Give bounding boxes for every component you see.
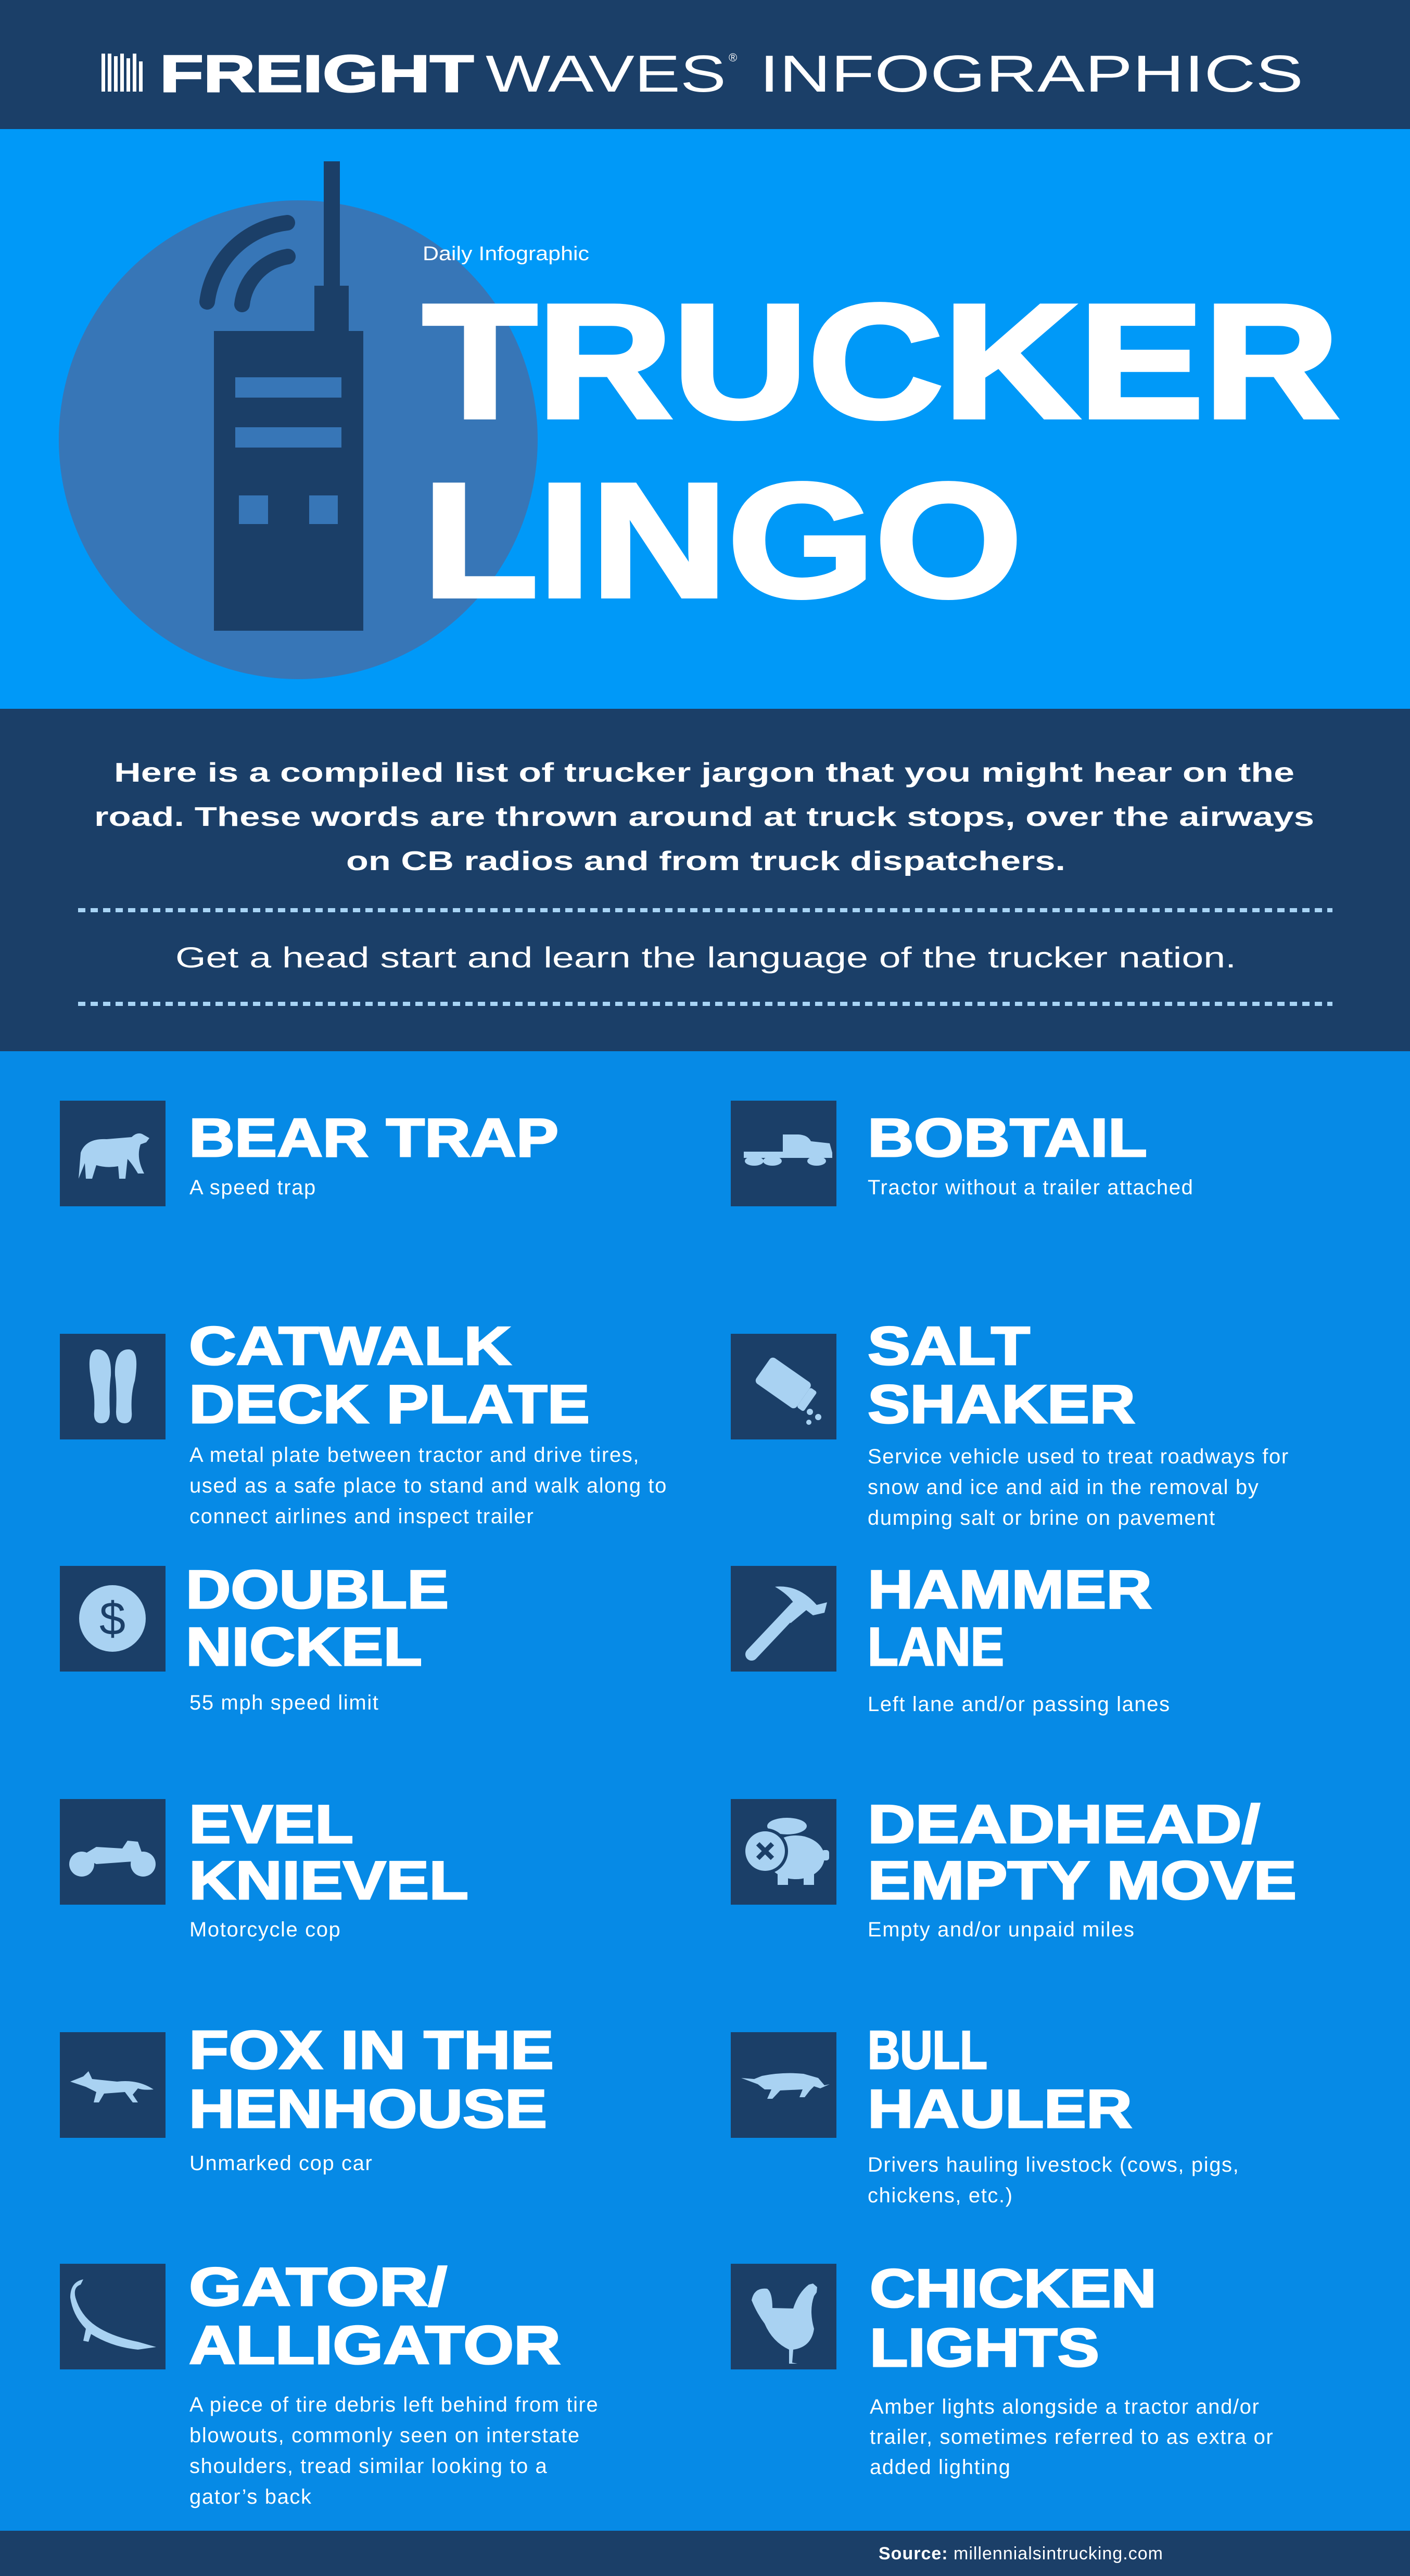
logo: freightwaves infographics: WAVES bbox=[486, 45, 726, 103]
term: gator alligator: blowouts, commonly seen on interstate bbox=[189, 2424, 580, 2447]
term: double nickel: DOUBLE bbox=[186, 1560, 449, 1620]
hero panel bbox=[0, 129, 1410, 709]
term: deadhead empty move: EMPTY MOVE bbox=[868, 1851, 1297, 1911]
icon: footprints bbox=[60, 1334, 166, 1439]
term: double nickel: NICKEL bbox=[186, 1617, 422, 1677]
term: gator alligator: A piece of tire debris left behind from tire bbox=[189, 2393, 599, 2416]
term: hammer lane: LANE bbox=[868, 1617, 1004, 1677]
term: salt shaker: Service vehicle used to treat roadways for bbox=[868, 1445, 1289, 1468]
term: bull hauler: Drivers hauling livestock (cows, pigs, bbox=[868, 2153, 1239, 2176]
term: gator alligator: ALLIGATOR bbox=[189, 2315, 561, 2376]
term: bull hauler bbox=[731, 2020, 1239, 2207]
term: salt shaker bbox=[731, 1316, 1289, 1529]
logo: freightwaves infographics: ® bbox=[729, 51, 737, 64]
term: chicken lights: added lighting bbox=[870, 2456, 1011, 2479]
term: fox in the henhouse bbox=[60, 2020, 554, 2175]
term: bear trap bbox=[60, 1101, 558, 1206]
term: deadhead empty move: DEADHEAD/ bbox=[868, 1794, 1260, 1855]
term: double nickel: 55 mph speed limit bbox=[189, 1691, 379, 1714]
footer: source bbox=[0, 2531, 1410, 2576]
term: chicken lights: CHICKEN bbox=[870, 2259, 1157, 2319]
term: chicken lights bbox=[731, 2259, 1274, 2479]
subtitle: daily infographic: Daily Infographic bbox=[423, 243, 589, 265]
icon: piggy bank bbox=[731, 1799, 836, 1905]
term: hammer lane: Left lane and/or passing lanes bbox=[868, 1693, 1171, 1716]
term: hammer lane bbox=[731, 1560, 1171, 1716]
term: bull hauler: HAULER bbox=[868, 2079, 1132, 2139]
icon: truck bbox=[731, 1101, 836, 1206]
intro text: Here is a compiled list of trucker jargon that you might hear on the bbox=[114, 758, 1294, 788]
icon: radio circle bbox=[59, 161, 538, 679]
term: deadhead empty move: Empty and/or unpaid miles bbox=[868, 1918, 1135, 1941]
term: gator alligator: gator’s back bbox=[189, 2485, 312, 2508]
term: gator alligator: shoulders, tread similar looking to a bbox=[189, 2455, 548, 2478]
icon: bull bbox=[731, 2032, 836, 2138]
term: salt shaker: snow and ice and aid in the removal by bbox=[868, 1476, 1259, 1499]
term: catwalk deck plate bbox=[60, 1316, 667, 1528]
icon: bear bbox=[60, 1101, 166, 1206]
term: catwalk deck plate: DECK PLATE bbox=[189, 1374, 590, 1435]
term: bobtail: Tractor without a trailer attached bbox=[868, 1176, 1194, 1199]
term: chicken lights: trailer, sometimes referred to as extra or bbox=[870, 2426, 1274, 2449]
icon: dollar coin bbox=[60, 1566, 166, 1672]
term: catwalk deck plate: used as a safe place to stand and walk along to bbox=[189, 1474, 667, 1497]
term: chicken lights: LIGHTS bbox=[870, 2318, 1099, 2378]
term: bear trap: A speed trap bbox=[189, 1176, 316, 1199]
intro text: on CB radios and from truck dispatchers. bbox=[346, 846, 1065, 876]
intro text bbox=[94, 758, 1314, 876]
icon: alligator bbox=[60, 2264, 166, 2369]
term: bear trap: BEAR TRAP bbox=[189, 1108, 558, 1168]
icon: dollar coin: $ bbox=[99, 1593, 125, 1645]
term: evel knievel: EVEL bbox=[189, 1794, 353, 1855]
term: catwalk deck plate: A metal plate between tractor and drive tires, bbox=[189, 1444, 640, 1466]
title: trucker lingo: TRUCKER bbox=[423, 271, 1339, 452]
title: trucker lingo bbox=[423, 271, 1339, 631]
term: fox in the henhouse: FOX IN THE bbox=[189, 2020, 554, 2081]
icon: rooster bbox=[731, 2264, 836, 2369]
logo: freightwaves infographics: INFOGRAPHICS bbox=[759, 45, 1303, 103]
icon: motorcycle bbox=[60, 1799, 166, 1905]
intro panel bbox=[0, 709, 1410, 1051]
main terms panel bbox=[0, 1051, 1410, 2531]
term: catwalk deck plate: connect airlines and inspect trailer bbox=[189, 1505, 534, 1528]
term: salt shaker: dumping salt or brine on pavement bbox=[868, 1507, 1216, 1529]
term: hammer lane: HAMMER bbox=[868, 1560, 1152, 1620]
icon: salt shaker bbox=[731, 1334, 836, 1439]
term: evel knievel bbox=[60, 1794, 468, 1941]
term: evel knievel: Motorcycle cop bbox=[189, 1918, 341, 1941]
logo: freightwaves infographics: FREIGHT bbox=[160, 45, 474, 103]
term: chicken lights: Amber lights alongside a tractor and/or bbox=[870, 2395, 1260, 2418]
term: evel knievel: KNIEVEL bbox=[189, 1851, 468, 1911]
term: double nickel bbox=[60, 1560, 449, 1714]
logo: freightwaves infographics bbox=[101, 45, 1303, 103]
term: gator alligator: GATOR/ bbox=[189, 2257, 447, 2317]
term: deadhead empty move bbox=[731, 1794, 1297, 1941]
icon: fox bbox=[60, 2032, 166, 2138]
term: bobtail: BOBTAIL bbox=[868, 1108, 1147, 1168]
term: catwalk deck plate: CATWALK bbox=[189, 1316, 511, 1376]
term: bull hauler: chickens, etc.) bbox=[868, 2184, 1013, 2207]
tagline: Get a head start and learn the language of the trucker nation. bbox=[175, 941, 1236, 974]
term: bobtail bbox=[731, 1101, 1194, 1206]
term: gator alligator bbox=[60, 2257, 599, 2508]
header bar bbox=[0, 0, 1410, 129]
term: salt shaker: SALT bbox=[868, 1316, 1030, 1376]
term: bull hauler: BULL bbox=[868, 2020, 987, 2081]
term: fox in the henhouse: HENHOUSE bbox=[189, 2079, 547, 2139]
title: trucker lingo: LINGO bbox=[423, 450, 1022, 631]
icon: hammer bbox=[731, 1566, 836, 1672]
term: salt shaker: SHAKER bbox=[868, 1374, 1135, 1435]
term: fox in the henhouse: Unmarked cop car bbox=[189, 2152, 373, 2175]
footer: source: Source: millennialsintrucking.com bbox=[879, 2544, 1163, 2564]
intro text: road. These words are thrown around at truck stops, over the airways bbox=[94, 802, 1314, 832]
